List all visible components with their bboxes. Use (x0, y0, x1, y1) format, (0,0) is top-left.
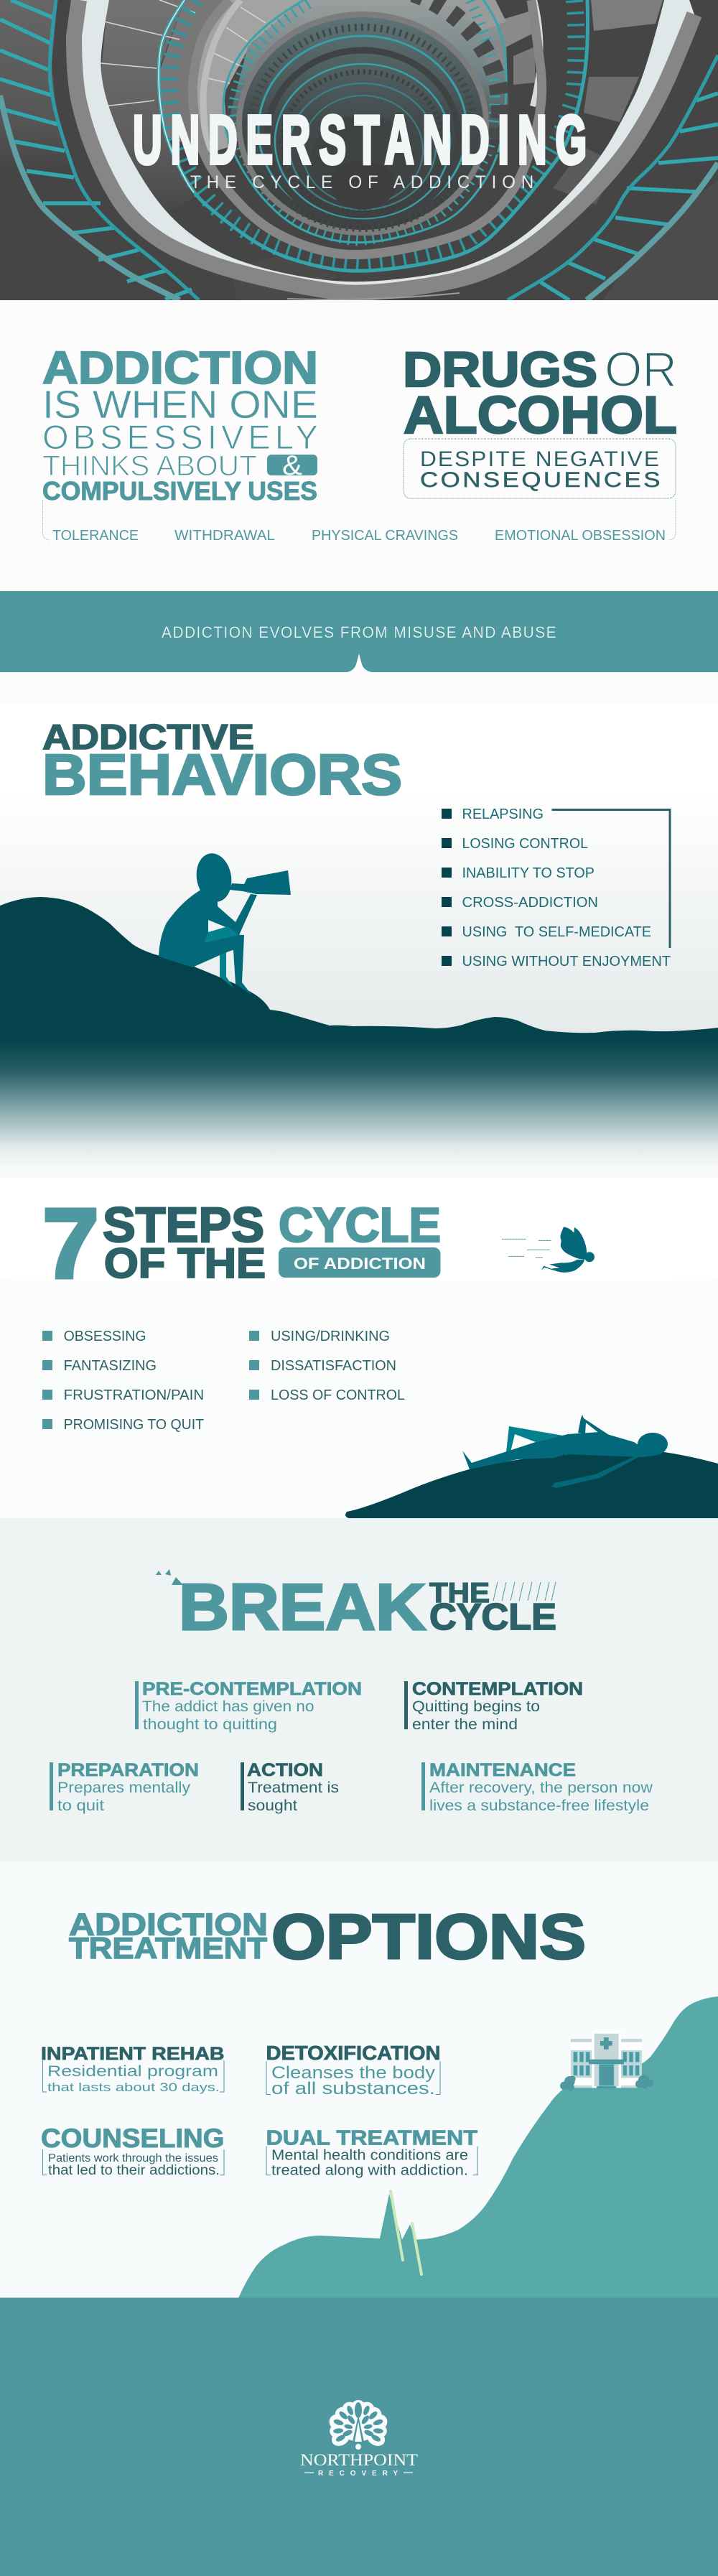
list: behaviors: USING WITHOUT ENJOYMENT (462, 954, 671, 970)
option: counseling (41, 2124, 224, 2178)
list: behaviors: USING TO SELF-MEDICATE (462, 924, 651, 940)
stage: action (241, 1760, 339, 1814)
heading: break the cycle (156, 1569, 556, 1644)
figure with telescope (159, 850, 291, 995)
stage: maintenance: lives a substance-free lifestyle (429, 1798, 649, 1814)
heading: addiction definition left: IS WHEN ONE (42, 382, 318, 427)
list: steps: DISSATISFACTION (271, 1358, 396, 1374)
option: detoxification: of all substances. (271, 2079, 435, 2098)
heading: addictive behaviors (42, 718, 402, 806)
stage: contemplation (404, 1679, 583, 1733)
stage: contemplation: CONTEMPLATION (412, 1679, 583, 1699)
stage: preparation: PREPARATION (57, 1760, 199, 1780)
stage: maintenance (421, 1760, 653, 1814)
option: counseling: Patients work through the issues (48, 2152, 218, 2165)
heading: drugs or alcohol (403, 342, 677, 445)
second teal rail (169, 0, 577, 264)
logo wordmark: NORTHPOINT (300, 2451, 418, 2469)
big grey handrail (74, 0, 694, 293)
option: counseling: that led to their addictions. (48, 2163, 220, 2178)
list: behaviors: RELAPSING (462, 806, 544, 822)
list: steps (42, 1329, 405, 1433)
symptoms frame and labels: WITHDRAWAL (174, 528, 275, 544)
symptoms frame and labels: PHYSICAL CRAVINGS (312, 528, 458, 544)
heading: addiction treatment options: OPTIONS (271, 1901, 586, 1972)
symptoms frame and labels: EMOTIONAL OBSESSION (495, 528, 666, 544)
list: behaviors: LOSING CONTROL (462, 836, 588, 852)
stage: pre-contemplation: PRE-CONTEMPLATION (142, 1679, 362, 1699)
heading: addiction definition left (42, 342, 322, 506)
option: detoxification: DETOXIFICATION (266, 2042, 441, 2064)
option: inpatient rehab (41, 2044, 224, 2094)
stage: contemplation: Quitting begins to (412, 1698, 540, 1715)
ampersand badge (267, 450, 317, 481)
third teal rail (233, 0, 495, 241)
outer teal rungs right (541, 93, 718, 300)
heading: addiction treatment options: TREATMENT (69, 1931, 267, 1965)
hill with fallen figure (345, 1415, 718, 1518)
banner: addiction evolves (0, 591, 718, 672)
option: inpatient rehab: Residential program (47, 2063, 218, 2080)
list: steps: FRUSTRATION/PAIN (64, 1387, 204, 1403)
stage: maintenance: After recovery, the person now (429, 1780, 653, 1796)
stage: pre-contemplation: thought to quitting (143, 1716, 277, 1733)
hero subtitle: THE CYCLE OF ADDICTION (190, 172, 539, 192)
list: behaviors: INABILITY TO STOP (462, 865, 595, 881)
option: detoxification (266, 2042, 441, 2098)
stage: action: ACTION (247, 1760, 323, 1780)
panel: break the cycle (0, 1518, 718, 1861)
stage: contemplation: enter the mind (412, 1716, 518, 1733)
heading: addiction definition left: OBSESSIVELY (42, 418, 322, 456)
stage: action: Treatment is (248, 1780, 339, 1796)
panel: definition of addiction (42, 342, 677, 544)
dark core and inner rings (242, 17, 482, 205)
heading: drugs or alcohol: OR (605, 342, 677, 397)
stage: preparation (50, 1760, 199, 1814)
option: inpatient rehab: that lasts about 30 days. (47, 2080, 220, 2094)
panel: addiction treatment options (0, 1861, 718, 2298)
logo wordmark: RECOVERY (318, 2470, 403, 2478)
heading: addiction definition left: THINKS ABOUT (42, 450, 257, 482)
option: inpatient rehab: INPATIENT REHAB (41, 2044, 224, 2064)
heading: 7 steps of the cycle: 7 (42, 1189, 99, 1299)
stage: preparation: to quit (57, 1798, 104, 1814)
logo: northpoint peacock mark (327, 2399, 389, 2450)
heading: 7 steps of the cycle: STEPS (103, 1197, 264, 1252)
stage: pre-contemplation: The addict has given no (142, 1698, 314, 1715)
heading: drugs or alcohol: ALCOHOL (404, 386, 677, 445)
ampersand badge: & (282, 450, 302, 481)
option: dual treatment: treated along with addiction. (271, 2163, 468, 2179)
heartbeat accent lines (391, 2191, 421, 2274)
stage: preparation: Prepares mentally (57, 1780, 191, 1796)
banner: addiction evolves: ADDICTION EVOLVES FROM MISUSE AND ABUSE (162, 623, 557, 641)
teal hill (238, 1996, 718, 2298)
heading: addiction definition left: COMPULSIVELY USES (42, 476, 317, 506)
option: dual treatment (266, 2127, 477, 2179)
list: steps: USING/DRINKING (271, 1329, 390, 1344)
icon: falling winged figure (502, 1227, 595, 1273)
panel: addictive behaviors (0, 704, 718, 1282)
list: steps: FANTASIZING (64, 1358, 157, 1374)
second grey rail (203, 0, 241, 151)
steps right side (591, 0, 663, 31)
white wall band (74, 0, 694, 293)
stair tread lines (101, 0, 266, 106)
heading: addictive behaviors: ADDICTIVE (42, 718, 254, 757)
logo wordmark (300, 2451, 418, 2478)
list: behaviors: CROSS-ADDICTION (462, 895, 598, 911)
callout: despite negative consequences: DESPITE NEGATIVE (420, 447, 661, 471)
option: dual treatment: DUAL TREATMENT (266, 2127, 477, 2150)
hero panel: spiral staircase (0, 0, 718, 300)
heading: addiction treatment options (69, 1901, 586, 1972)
heading: break the cycle: CYCLE (429, 1596, 556, 1638)
list: steps: LOSS OF CONTROL (271, 1387, 405, 1403)
stage: action: sought (248, 1798, 297, 1814)
footer panel (0, 2298, 718, 2576)
callout: despite negative consequences: CONSEQUENCES (420, 468, 663, 492)
heading: addiction treatment options: ADDICTION (69, 1907, 268, 1942)
option: counseling: COUNSELING (41, 2124, 224, 2153)
list: behaviors (442, 806, 671, 970)
list: steps: OBSESSING (64, 1329, 146, 1344)
heading: addictive behaviors: BEHAVIORS (42, 743, 402, 806)
hill landscape (0, 897, 718, 1167)
option: dual treatment: Mental health conditions are (271, 2148, 468, 2164)
icon: hospital on hill (560, 2031, 653, 2091)
heading: 7 steps of the cycle: CYCLE (279, 1198, 441, 1252)
stage: maintenance: MAINTENANCE (429, 1760, 576, 1780)
symptoms frame and labels (43, 498, 676, 544)
heading: addiction definition left: ADDICTION (42, 342, 318, 394)
callout: despite negative consequences (404, 439, 676, 498)
heading: 7 steps of the cycle: OF ADDICTION (294, 1255, 426, 1273)
heading: break the cycle: BREAK (179, 1571, 426, 1644)
option: detoxification: Cleanses the body (271, 2063, 435, 2083)
heading: 7 steps of the cycle (42, 1189, 441, 1299)
heading: 7 steps of the cycle: OF THE (104, 1240, 266, 1287)
list: steps: PROMISING TO QUIT (64, 1417, 204, 1433)
panel: seven steps of the cycle (0, 1189, 718, 1518)
heading: break the cycle: THE (429, 1578, 490, 1609)
stage: pre-contemplation (135, 1679, 362, 1733)
outer teal rungs left (0, 0, 192, 299)
heading: drugs or alcohol: DRUGS (403, 342, 597, 397)
symptoms frame and labels: TOLERANCE (52, 528, 139, 544)
